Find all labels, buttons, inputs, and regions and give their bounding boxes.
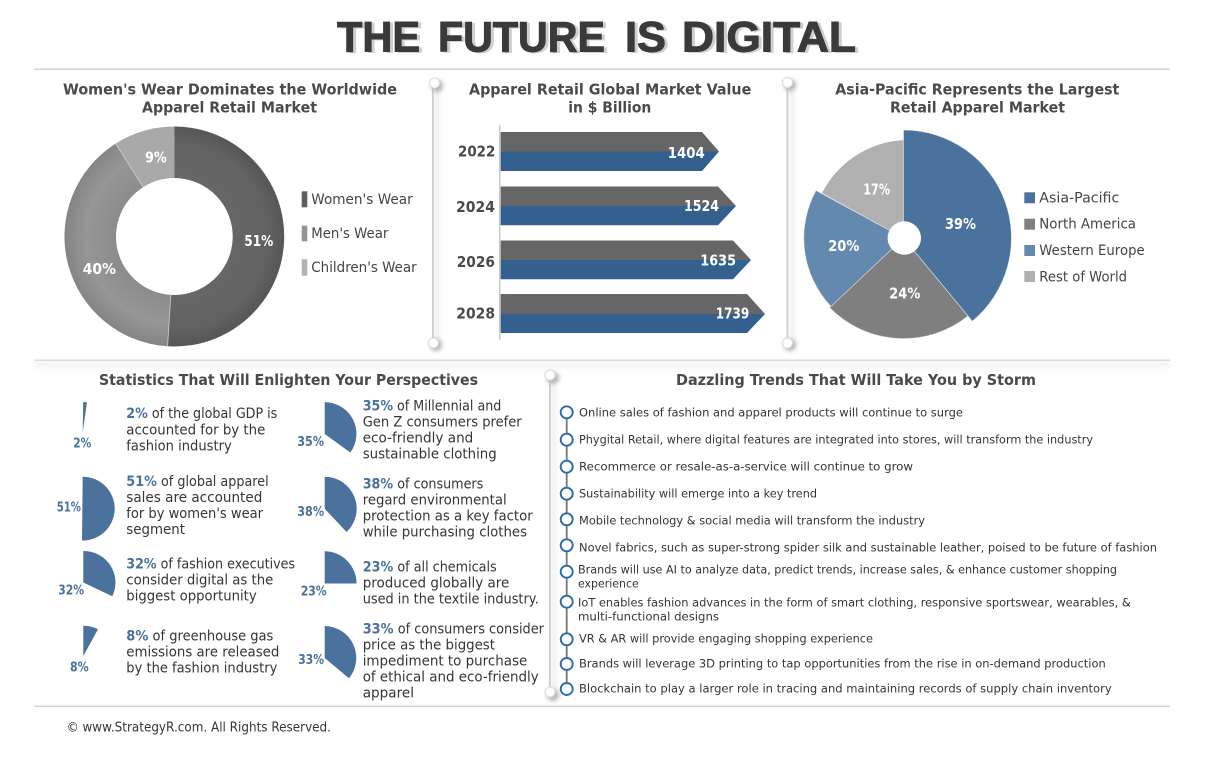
arrow bar chart: 1739 [716,305,749,323]
donut chart: 51% [244,232,273,250]
arrow bar chart: 1404 [668,144,705,162]
stat: 51% apparel sales [57,474,269,541]
title: DIGITAL [685,14,859,62]
trend list [578,406,1157,695]
title: FUTURE [441,14,608,62]
arrow bar chart [456,125,765,340]
timeline markers [561,406,573,695]
stat: 33% price impediment: apparel [363,685,414,701]
arrow bar chart: 2024 [456,198,495,216]
heading: market value [469,82,751,116]
heading: regional market: Asia-Pacific Represents the Largest [835,82,1119,98]
stat: 38% environmental protection: while purchasing clothes [363,525,527,541]
donut chart: 9% [145,149,167,167]
stat: 51% apparel sales: for by women's wear [126,506,263,522]
trend list: Sustainability will emerge into a key trend [579,486,817,500]
stat: 8% greenhouse gas: 8% [70,660,89,676]
trend list: Blockchain to play a larger role in tracing and maintaining records of supply chain inventory [579,681,1112,695]
stat: 33% price impediment: price as the biggest [363,637,496,653]
trend list: VR & AR will provide engaging shopping experience [579,632,873,646]
pie chart: 39% [945,215,976,233]
legend: regions: North America [1039,217,1136,233]
stat: 23% chemicals [301,551,539,608]
legend: apparel segments [302,191,417,276]
arrow bar chart: 2022 [458,142,495,160]
stat: 23% chemicals: used in the textile industry. [363,592,539,608]
stat: 32% digital opportunity: 32% [58,582,84,598]
donut chart: 40% [83,260,116,278]
stat: 33% price impediment: impediment to purchase [363,653,527,669]
stat: 8% greenhouse gas: emissions are released [126,645,279,661]
heading: statistics: Statistics That Will Enlighten Your Perspectives [99,372,478,389]
stat: 38% environmental protection: regard environmental [363,493,507,509]
trend list: experience [578,576,639,590]
stat: 51% apparel sales: sales are accounted [126,490,262,506]
stat: 23% chemicals: 23% of all chemicals [363,560,497,576]
title: THE [337,14,420,62]
divider: bottom [545,370,559,701]
stat: 2% GDP: 2% [73,436,92,452]
stat: 32% digital opportunity: 32% of fashion executives [126,556,295,572]
trend list: Brands will leverage 3D printing to tap opportunities from the rise in on-demand production [579,656,1106,670]
stat: 35% eco-friendly: sustainable clothing [363,447,497,463]
trend list: Novel fabrics, such as super-strong spider silk and sustainable leather, poised to be future of fashion [579,541,1157,555]
heading: market value: Apparel Retail Global Market Value [469,82,751,98]
stat: 23% chemicals: produced globally are [363,576,509,592]
heading: regional market [835,82,1119,116]
heading: trends: Dazzling Trends That Will Take You by Storm [676,372,1036,389]
stat: 8% greenhouse gas [70,626,279,677]
panel: trends [561,372,1157,695]
stat: 8% greenhouse gas: 8% of greenhouse gas [126,629,273,645]
panel: market value [456,82,765,340]
trend list: Recommerce or resale-as-a-service will continue to grow [579,460,913,474]
legend: regions: Rest of World [1039,269,1127,285]
panel: statistics [57,372,544,701]
heading: apparel segments: Apparel Retail Market [142,100,317,116]
legend: regions: Western Europe [1039,243,1145,259]
stat: 33% price impediment: 33% of consumers consider [363,621,544,637]
trend list: Phygital Retail, where digital features are integrated into stores, will transform the industry [579,432,1093,446]
title: FUTURE [438,14,605,62]
stat: 32% digital opportunity [58,551,295,604]
pie chart: 20% [828,237,859,255]
stat: 33% price impediment: 33% [298,652,324,668]
stat: 51% apparel sales: 51% [57,500,81,516]
legend: regions: Asia-Pacific [1039,191,1119,207]
title: DIGITAL [682,14,856,62]
heading: market value: in $ Billion [568,100,651,116]
title [337,14,859,62]
stat: 33% price impediment [298,621,544,701]
title: IS [625,14,666,62]
trend list: IoT enables fashion advances in the form of smart clothing, responsive sportswear, wearables, & [578,596,1131,610]
stat: 32% digital opportunity: consider digital as the [126,572,273,588]
stat: 35% eco-friendly: eco-friendly and [363,431,473,447]
stat: 38% environmental protection [297,477,533,541]
title: IS [628,14,669,62]
arrow bar chart: 1524 [684,197,719,215]
heading: regional market: Retail Apparel Market [890,100,1065,116]
stat: 2% GDP [73,402,277,455]
trend list: Brands will use AI to analyze data, predict trends, increase sales, & enhance customer shopping [578,562,1117,576]
stat: 38% environmental protection: protection as a key factor [363,509,533,525]
stat: 35% eco-friendly: 35% of Millennial and [363,399,501,415]
heading: apparel segments [63,82,397,116]
stat: 35% eco-friendly: 35% [297,434,324,450]
legend: regions [1024,191,1145,285]
stat: 38% environmental protection: 38% [297,504,324,520]
arrow bar chart: 2026 [457,253,495,271]
divider: right [782,78,796,351]
arrow bar chart: 2028 [456,304,495,322]
stat: 8% greenhouse gas: by the fashion industry [126,661,277,677]
footer: © www.StrategyR.com. All Rights Reserved. [67,721,331,736]
legend: apparel segments: Children's Wear [311,260,417,276]
legend: apparel segments: Women's Wear [311,192,413,208]
divider: left [428,78,443,351]
legend: apparel segments: Men's Wear [311,226,389,242]
stat: 38% environmental protection: 38% of consumers [363,477,483,493]
title: THE [340,14,423,62]
stat: 35% eco-friendly [297,399,522,463]
pie chart [804,130,1011,339]
trend list: Online sales of fashion and apparel products will continue to surge [579,406,963,420]
panel: regional market [804,82,1145,339]
stat: 2% GDP: 2% of the global GDP is [126,406,277,422]
stat: 51% apparel sales: 51% of global apparel [126,474,269,490]
stat: 2% GDP: accounted for by the [126,423,265,439]
donut chart [64,126,284,346]
stat: 33% price impediment: of ethical and eco-friendly [363,669,539,685]
pie chart: 17% [863,181,890,199]
panel: apparel segments [63,82,417,346]
stat: 23% chemicals: 23% [301,583,327,599]
stat: 51% apparel sales: segment [126,522,186,538]
heading: apparel segments: Women's Wear Dominates the Worldwide [63,82,397,98]
stat: 35% eco-friendly: Gen Z consumers prefer [363,415,522,431]
pie chart: 24% [889,285,920,303]
trend list: Mobile technology & social media will transform the industry [579,514,925,528]
arrow bar chart: 1635 [700,251,736,269]
trend list: multi-functional designs [578,610,719,624]
stat: 32% digital opportunity: biggest opportunity [126,588,257,604]
stat: 2% GDP: fashion industry [126,439,232,455]
